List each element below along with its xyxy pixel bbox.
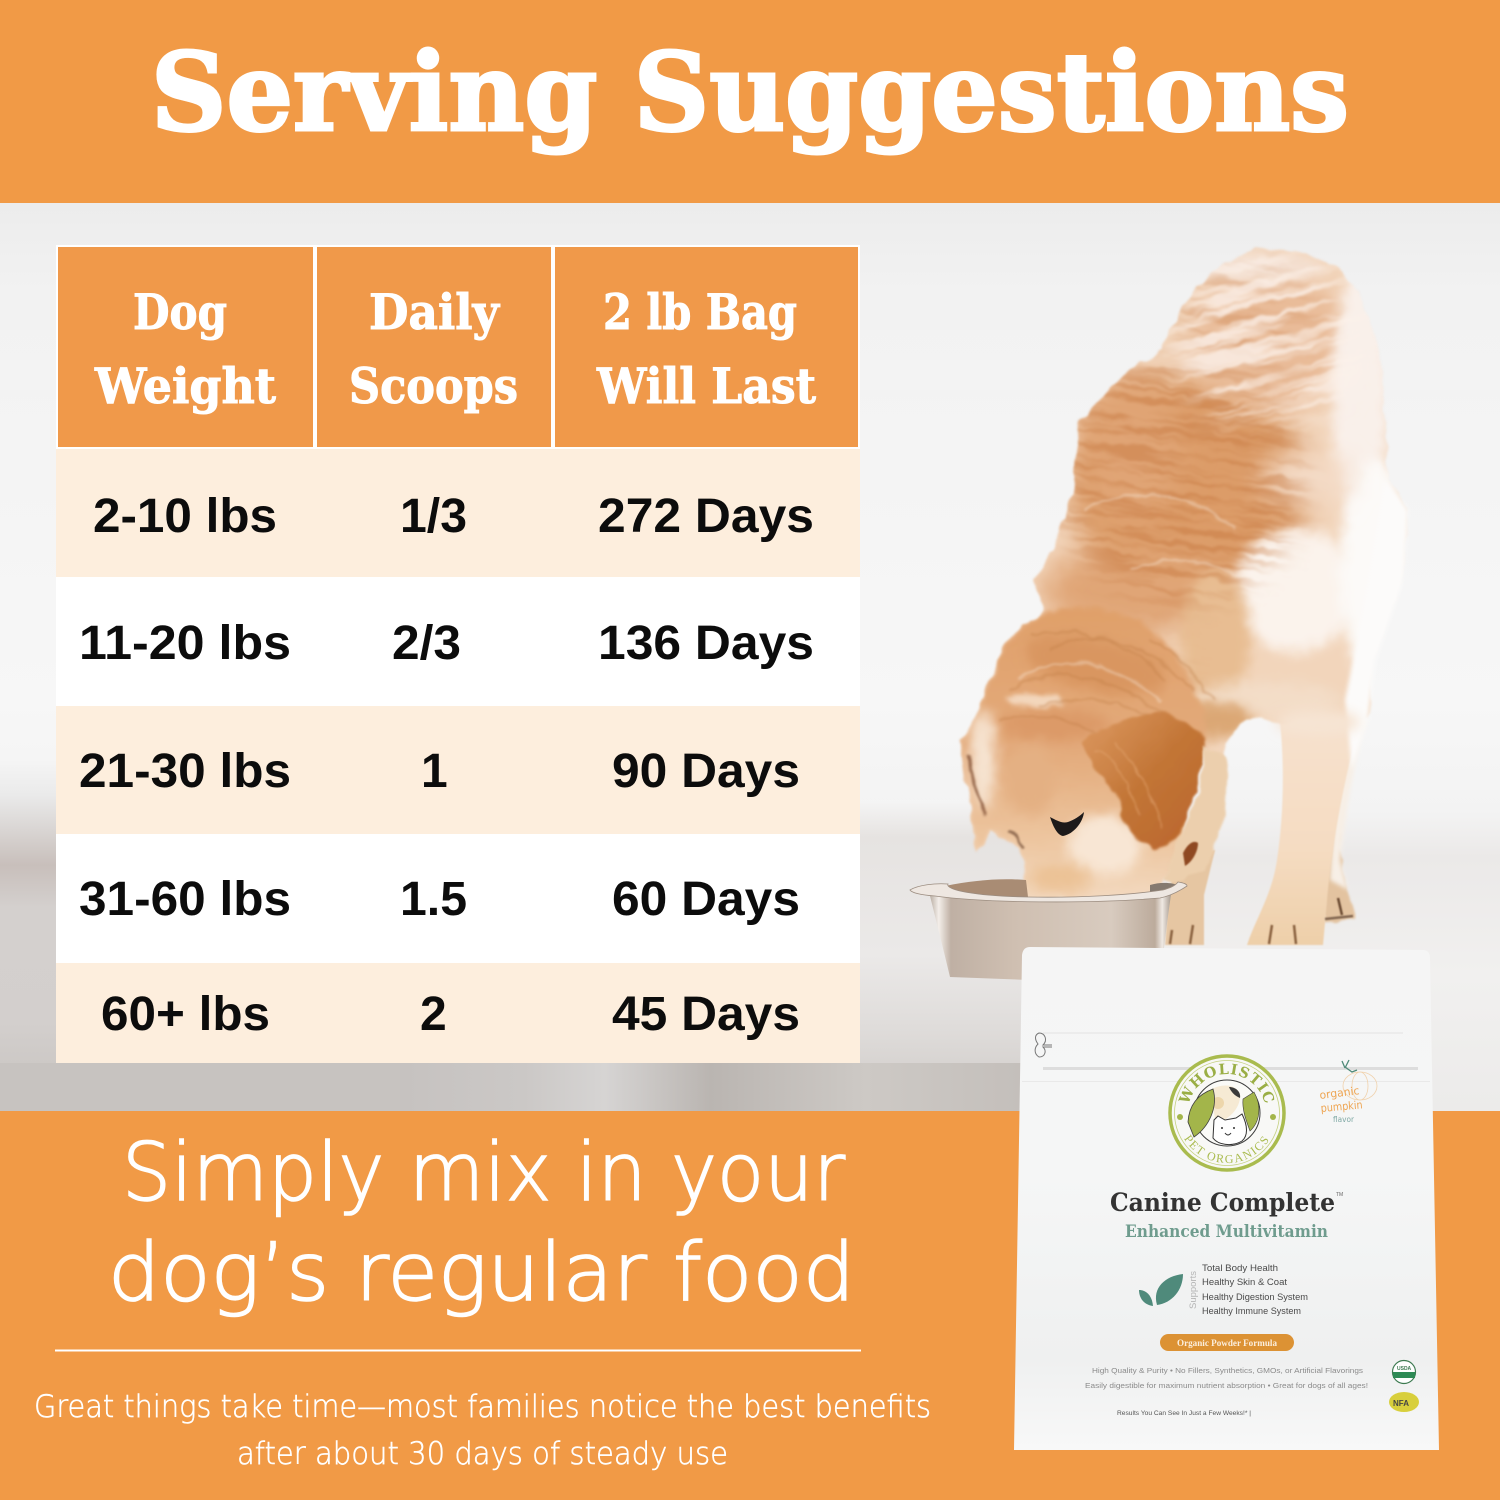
fluffy white chest fringe	[1345, 480, 1408, 770]
row: 21-30 lbs: 21-30 lbs	[79, 745, 291, 798]
text: results note	[34, 1389, 931, 1472]
background photo backdrop	[0, 203, 1500, 1111]
header cell: daily scoops	[317, 247, 551, 447]
heading: mix instruction: Simply mix in your	[122, 1126, 845, 1219]
header cell: bag duration: Will Last	[596, 357, 816, 415]
flavor badge: organic pumpkin: pumpkin	[1320, 1098, 1363, 1115]
toes	[1170, 898, 1353, 944]
product subtitle: Enhanced Multivitamin	[1125, 1222, 1328, 1242]
serving table	[56, 245, 860, 1063]
benefits list	[1202, 1263, 1308, 1317]
benefits list: Total Body Health	[1202, 1263, 1278, 1274]
row: 31-60 lbs: 1.5	[400, 873, 467, 926]
hind foot	[1322, 780, 1355, 922]
row: 2-10 lbs: 272 Days	[598, 490, 814, 543]
dog photo illustration	[910, 246, 1401, 980]
row: 60+ lbs: 45 Days	[612, 988, 800, 1041]
row: 21-30 lbs: 1	[421, 745, 448, 798]
USDA organic seal	[1392, 1360, 1416, 1384]
dog body and head fur	[958, 246, 1407, 897]
title: Serving Suggestions	[151, 30, 1349, 156]
divider line	[55, 1350, 861, 1352]
row: 11-20 lbs: 2/3	[392, 617, 461, 670]
flavor badge: organic pumpkin: organic	[1319, 1084, 1360, 1102]
row: 31-60 lbs	[56, 834, 860, 963]
fur below ear	[1163, 745, 1228, 882]
row: 11-20 lbs: 11-20 lbs	[79, 617, 291, 670]
row: 31-60 lbs: 31-60 lbs	[79, 873, 291, 926]
logo badge: PET ORGANICS	[1184, 1134, 1268, 1164]
bag fine print	[1085, 1366, 1368, 1417]
zip lines	[1022, 1032, 1430, 1082]
heading: mix instruction: dog’s regular food	[108, 1226, 855, 1319]
row: 60+ lbs: 60+ lbs	[101, 988, 270, 1041]
text: results note: after about 30 days of steady use	[237, 1436, 728, 1472]
header cell: dog weight	[58, 247, 313, 447]
icon: leaves	[1139, 1274, 1183, 1306]
header cell: daily scoops: Daily	[369, 283, 500, 341]
benefits list: Healthy Immune System	[1202, 1306, 1301, 1317]
flavor badge: organic pumpkin	[1319, 1060, 1377, 1124]
non-GMO seal: NFA	[1393, 1399, 1409, 1408]
USDA organic seal: USDA	[1397, 1366, 1412, 1372]
left ear edge	[969, 757, 985, 815]
vertical label: supports: Supports	[1188, 1270, 1198, 1309]
icon: tear notch bone	[1035, 1033, 1052, 1057]
logo dog face and leaves	[1210, 1085, 1240, 1124]
head	[960, 607, 1207, 899]
benefits list: Healthy Digestion System	[1202, 1292, 1308, 1303]
bottom orange panel	[0, 1111, 1500, 1500]
row: 60+ lbs: 2	[420, 988, 447, 1041]
header cell: dog weight: Dog	[133, 283, 227, 341]
eye	[1050, 812, 1084, 836]
top orange banner	[0, 0, 1500, 203]
bag fine print: High Quality & Purity • No Fillers, Synthetics, GMOs, or Artificial Flavorings	[1092, 1366, 1363, 1375]
row: 60+ lbs	[56, 963, 860, 1063]
text: results note: Great things take time—most families notice the best benefits	[34, 1389, 931, 1425]
row: 2-10 lbs: 2-10 lbs	[93, 490, 277, 543]
hind fringe	[1330, 700, 1368, 890]
header cell: dog weight: Weight	[94, 357, 276, 415]
header cell: bag duration	[555, 247, 858, 447]
row: 21-30 lbs: 90 Days	[612, 745, 800, 798]
ear	[1083, 713, 1207, 848]
fur texture streaks	[1059, 262, 1314, 610]
bag fine print: Results You Can See In Just a Few Weeks!* |	[1117, 1411, 1251, 1417]
header cell: daily scoops: Scoops	[349, 357, 518, 415]
flavor badge: organic pumpkin: flavor	[1333, 1115, 1355, 1124]
bag fine print: Easily digestible for maximum nutrient absorption • Great for dogs of all ages!	[1085, 1381, 1368, 1390]
logo badge: WHOLISTIC	[1178, 1064, 1274, 1102]
far front leg	[1165, 850, 1215, 945]
leg blend	[1276, 709, 1360, 735]
fur strokes	[1000, 632, 1215, 745]
benefits list: Healthy Skin & Coat	[1202, 1277, 1287, 1288]
food bowl	[910, 879, 1187, 985]
product bag	[1014, 947, 1439, 1450]
row: 11-20 lbs	[56, 577, 860, 706]
formula pill: Organic Powder Formula	[1177, 1339, 1277, 1349]
header cell: bag duration: 2 lb Bag	[603, 283, 797, 341]
neck ruff	[1177, 702, 1253, 738]
dark ear fold	[1183, 842, 1198, 866]
formula pill	[1160, 1334, 1294, 1351]
trademark: TM	[1336, 1192, 1343, 1198]
heading: mix instruction	[108, 1126, 855, 1319]
row: 2-10 lbs: 1/3	[400, 490, 467, 543]
near front leg	[1247, 700, 1365, 945]
non-GMO seal	[1389, 1392, 1419, 1412]
row: 11-20 lbs: 136 Days	[598, 617, 814, 670]
product name: Canine Complete	[1110, 1188, 1335, 1217]
bag body	[1014, 947, 1439, 1450]
row: 21-30 lbs	[56, 706, 860, 834]
logo badge	[1168, 1054, 1286, 1172]
row: 2-10 lbs	[56, 449, 860, 577]
row: 31-60 lbs: 60 Days	[612, 873, 800, 926]
